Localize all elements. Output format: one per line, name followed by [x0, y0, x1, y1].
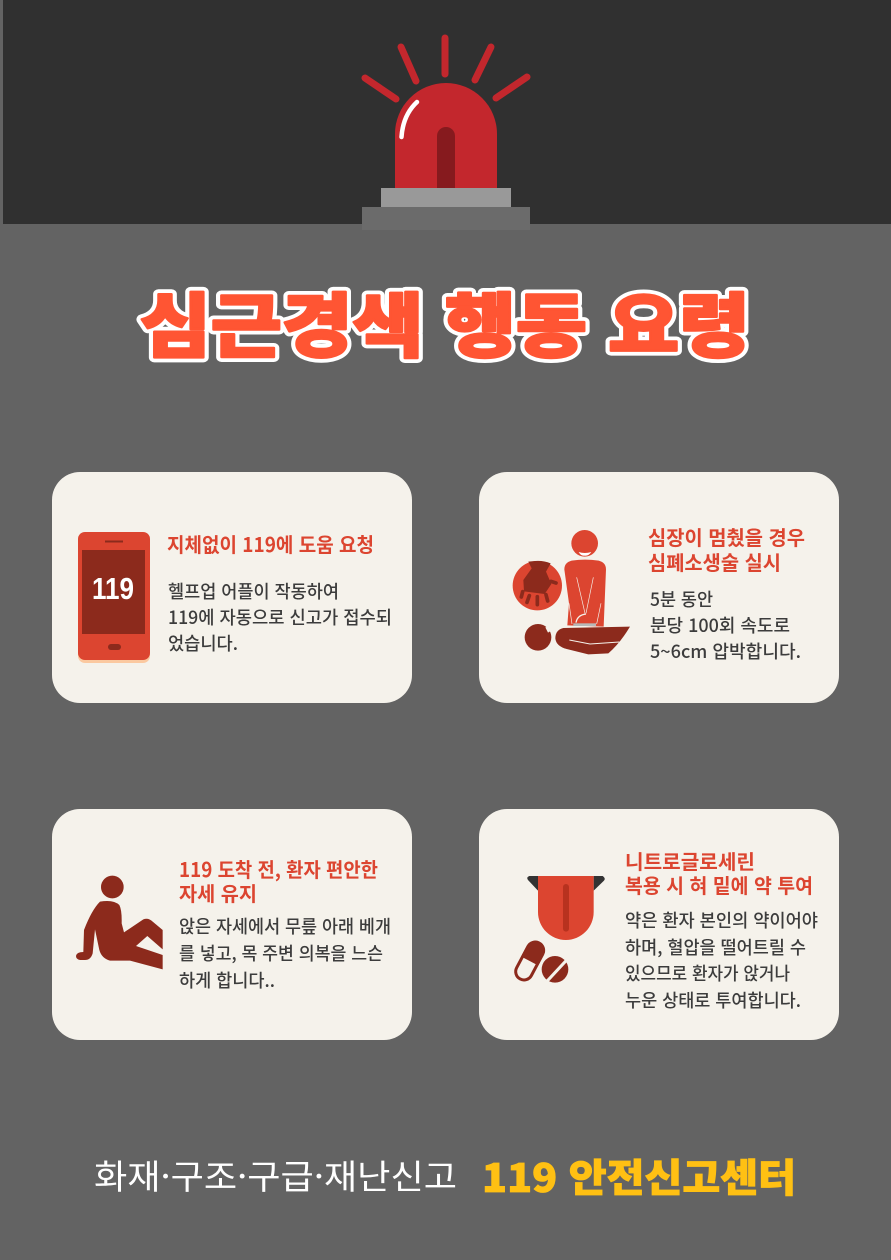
text block: comfortable position: 앉은 자세에서 무릎 아래 베개: [179, 913, 391, 939]
text block: comfortable position: 하게 합니다..: [179, 967, 275, 993]
text block: call for help: 었습니다.: [168, 630, 238, 656]
text block: comfortable position: [179, 913, 391, 993]
title: 심근경색 행동 요령: [140, 271, 750, 372]
icon: CPR: [513, 530, 630, 654]
text block: comfortable position: 를 넣고, 목 주변 의복을 느슨: [179, 940, 383, 966]
header band: [3, 0, 891, 224]
footer: safety center: 119 안전신고센터: [482, 1148, 796, 1204]
heading: nitroglycerin: [625, 846, 813, 899]
text block: nitroglycerin: 약은 환자 본인의 약이어야: [625, 907, 818, 933]
text block: CPR: 5~6cm 압박합니다.: [650, 638, 801, 664]
icon: siren: [362, 38, 530, 230]
icon: seated person: [76, 876, 163, 969]
text block: nitroglycerin: [625, 907, 818, 1013]
heading: nitroglycerin: 니트로글로세린: [625, 846, 755, 875]
heading: nitroglycerin: 복용 시 혀 밑에 약 투여: [625, 870, 813, 899]
text block: nitroglycerin: 있으므로 환자가 앉거나: [625, 960, 790, 986]
text block: nitroglycerin: 하며, 혈압을 떨어트릴 수: [625, 934, 806, 960]
text block: call for help: 헬프업 어플이 작동하여: [168, 578, 339, 604]
text block: CPR: [650, 586, 801, 664]
icon: phone: 119: [92, 571, 134, 606]
heading: comfortable position: 자세 유지: [179, 878, 257, 907]
text block: call for help: [168, 578, 392, 656]
heading: CPR: [648, 522, 805, 576]
text block: CPR: 5분 동안: [650, 586, 713, 612]
panel: call for help: [52, 472, 412, 703]
heading: CPR: 심폐소생술 실시: [648, 547, 781, 576]
text block: call for help: 119에 자동으로 신고가 접수되: [168, 604, 392, 630]
panel: comfortable position: [52, 809, 412, 1040]
footer: report types: 화재·구조·구급·재난신고: [94, 1150, 457, 1199]
heading: comfortable position: 119 도착 전, 환자 편안한: [179, 854, 378, 883]
text block: nitroglycerin: 누운 상태로 투여합니다.: [625, 987, 801, 1013]
text block: CPR: 분당 100회 속도로: [650, 612, 790, 638]
panel: CPR: [479, 472, 839, 703]
heading: comfortable position: [179, 854, 378, 907]
heading: call for help: 지체없이 119에 도움 요청: [167, 529, 374, 558]
panel: nitroglycerin: [479, 809, 839, 1040]
icon: tongue and pills: [512, 876, 605, 983]
heading: CPR: 심장이 멈췄을 경우: [648, 522, 805, 551]
icon: phone: [78, 532, 150, 663]
title: 심근경색 행동 요령: [140, 271, 750, 372]
